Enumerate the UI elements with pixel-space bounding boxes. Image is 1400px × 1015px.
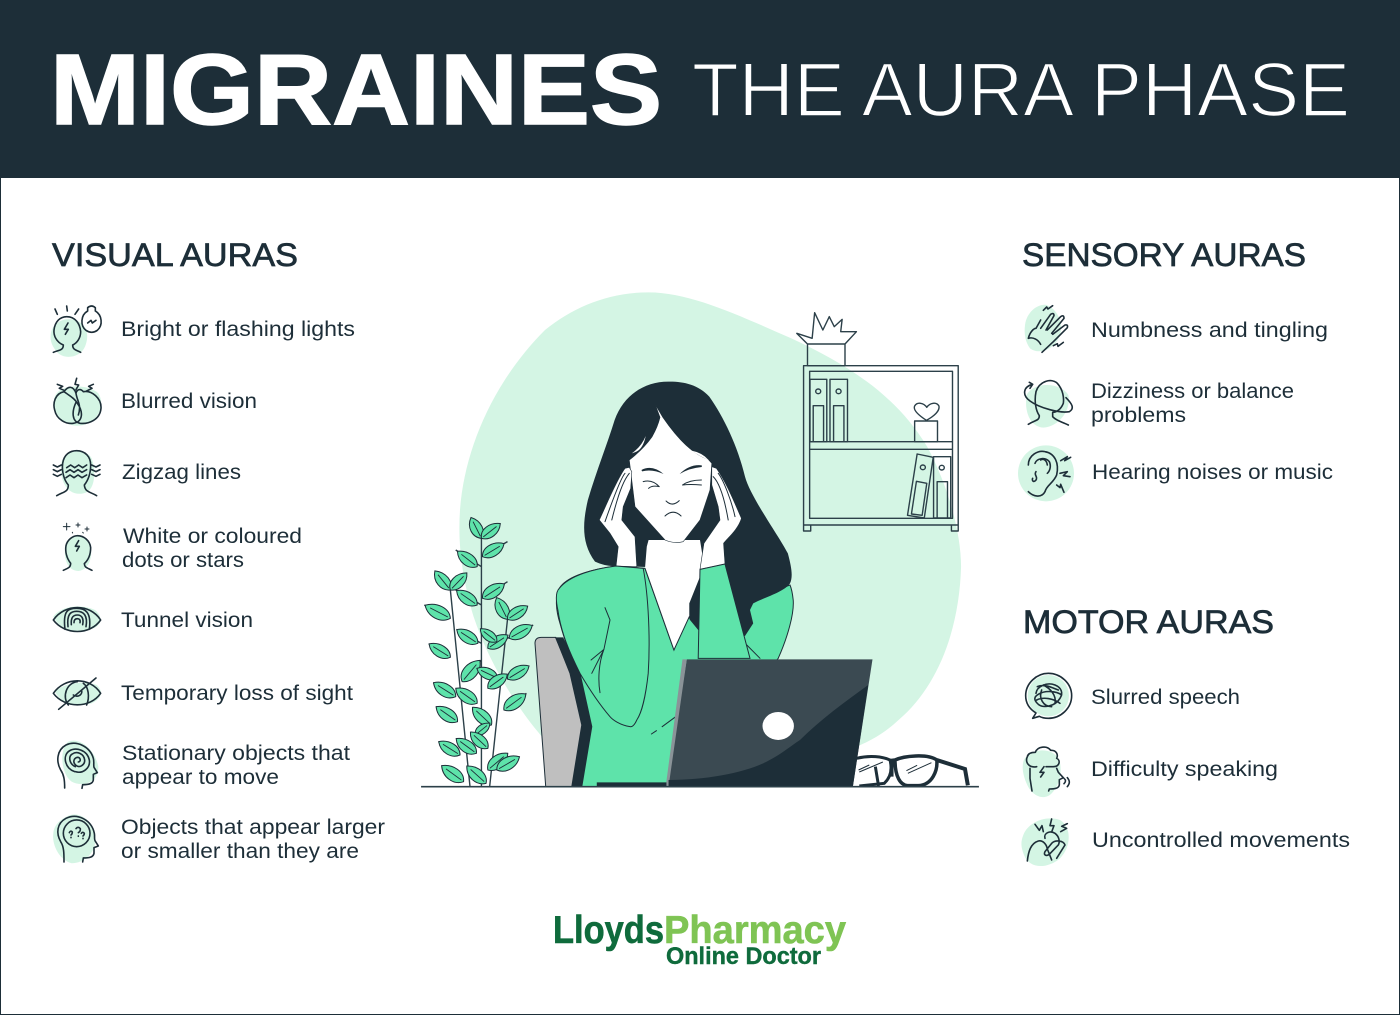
item: difficulty speaking: Difficulty speaking — [1091, 758, 1278, 781]
item: blurred vision — [54, 378, 257, 426]
item: uncontrolled movements: Uncontrolled movements — [1092, 829, 1350, 852]
panel: motor auras — [1021, 604, 1350, 866]
woman's face — [629, 404, 712, 543]
item: stationary objects: Stationary objects that — [122, 742, 350, 765]
item: objects larger or smaller: Objects that appear larger — [121, 816, 385, 839]
sweater sleeves — [556, 564, 760, 734]
item: objects larger or smaller — [53, 815, 385, 863]
item: blurred vision: Blurred vision — [121, 390, 257, 413]
glasses — [857, 756, 968, 786]
panel: sensory auras — [1018, 237, 1333, 501]
desk line — [421, 786, 979, 788]
item: dizziness: Dizziness or balance — [1091, 380, 1294, 403]
logo: LloydsPharmacy Online Doctor: Pharmacy — [664, 909, 846, 952]
laptop — [597, 659, 872, 787]
item: hearing noises — [1018, 445, 1333, 501]
item: zigzag lines — [53, 451, 241, 496]
item: tunnel vision — [53, 607, 253, 632]
woman's neck — [645, 540, 703, 650]
wall shelf with plant, binders and heart — [797, 313, 958, 531]
item: numbness and tingling: Numbness and tingling — [1091, 319, 1328, 342]
logo: LloydsPharmacy Online Doctor: Lloyds — [553, 909, 664, 952]
heading: motor auras: MOTOR AURAS — [1023, 604, 1274, 640]
woman's hands — [599, 467, 741, 569]
woman's hair — [584, 382, 792, 636]
item: temporary loss of sight: Temporary loss of sight — [121, 682, 353, 705]
item: dots or stars — [63, 523, 302, 572]
item: hearing noises: Hearing noises or music — [1092, 461, 1333, 484]
item: difficulty speaking — [1023, 747, 1278, 797]
logo: LloydsPharmacy Online Doctor — [553, 909, 846, 970]
item: dizziness — [1025, 380, 1294, 428]
item: bright or flashing lights — [51, 306, 355, 357]
item: tunnel vision: Tunnel vision — [121, 609, 253, 632]
item: uncontrolled movements — [1021, 818, 1350, 866]
heading: sensory auras: SENSORY AURAS — [1022, 237, 1306, 273]
header banner — [0, 0, 1400, 178]
item: temporary loss of sight — [53, 678, 353, 709]
item: slurred speech — [1026, 673, 1240, 718]
item: stationary objects — [58, 741, 350, 789]
title: MIGRAINES — [50, 34, 662, 146]
item: numbness and tingling — [1025, 305, 1328, 352]
central illustration: woman with migraine at desk — [421, 292, 979, 788]
item: zigzag lines: Zigzag lines — [122, 461, 241, 484]
chair — [535, 637, 592, 787]
background blob — [459, 292, 961, 750]
heading: visual auras: VISUAL AURAS — [52, 237, 298, 273]
item: bright or flashing lights: Bright or flashing lights — [121, 318, 355, 341]
panel: visual auras — [51, 237, 385, 863]
item: dots or stars: White or coloured — [123, 525, 302, 548]
item: dizziness: problems — [1091, 404, 1186, 427]
item: objects larger or smaller: or smaller than they are — [121, 840, 359, 863]
item: dots or stars: dots or stars — [122, 549, 244, 572]
sweater — [556, 566, 793, 787]
item: slurred speech: Slurred speech — [1091, 686, 1240, 709]
logo: LloydsPharmacy Online Doctor: Online Doctor — [666, 943, 821, 970]
plant — [422, 515, 536, 788]
item: stationary objects: appear to move — [122, 766, 279, 789]
subtitle: THE AURA PHASE — [692, 48, 1350, 133]
